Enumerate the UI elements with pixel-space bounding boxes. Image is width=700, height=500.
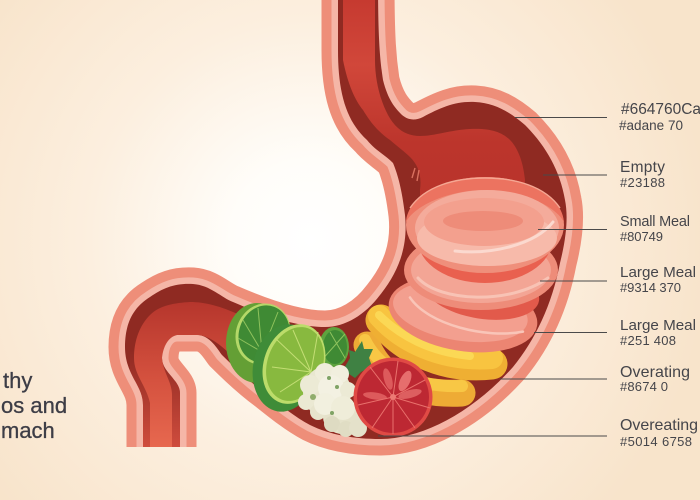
- label overeating: Overeating: [620, 417, 698, 434]
- label overating: Overating: [620, 364, 690, 381]
- cropped title: mach: [1, 418, 55, 443]
- banana lower: [365, 340, 462, 393]
- label large meal one: Large Meal: [620, 264, 696, 281]
- label small meal: [620, 214, 690, 244]
- label large meal two: #251 408: [620, 333, 676, 348]
- label overeating: #5014 6758: [620, 434, 692, 449]
- label large meal two: [620, 317, 696, 348]
- callout lines: [378, 118, 607, 436]
- duodenum red layer: [134, 302, 236, 447]
- label overating: #8674 0: [620, 379, 668, 394]
- label one: #adane 70: [619, 118, 683, 133]
- label one: [619, 101, 700, 133]
- lime three: [319, 327, 349, 367]
- lime two: [246, 315, 336, 417]
- label empty: #23188: [620, 175, 665, 190]
- stomach cavity: [125, 0, 567, 460]
- fold highlight: [412, 168, 419, 181]
- label overating: [620, 364, 690, 394]
- labels: [619, 101, 700, 449]
- label large meal two: Large Meal: [620, 317, 696, 334]
- lime one: [226, 296, 299, 383]
- stomach inner pale lining: [125, 0, 567, 460]
- disc three: [383, 251, 545, 362]
- disc two: [404, 197, 558, 310]
- herb leaf: [343, 341, 373, 378]
- esophagus and stomach body red layer: [343, 0, 525, 260]
- label empty: Empty: [620, 159, 665, 176]
- label overeating: [620, 417, 698, 449]
- stomach outer wall: [125, 0, 567, 460]
- cauliflower: [298, 363, 367, 437]
- banana upper: [379, 315, 492, 365]
- label one: #664760Ca: [621, 101, 700, 118]
- disc one: [406, 177, 564, 273]
- label large meal one: #9314 370: [620, 280, 681, 295]
- label empty: [620, 159, 665, 190]
- food contents: [226, 177, 564, 437]
- stomach anatomy: [125, 0, 567, 460]
- tomato slice: [354, 358, 432, 436]
- cropped title: [1, 368, 67, 443]
- cropped title: os and: [1, 393, 67, 418]
- label large meal one: [620, 264, 696, 295]
- label small meal: #80749: [620, 229, 663, 244]
- label small meal: Small Meal: [620, 214, 690, 230]
- cropped title: thy: [3, 368, 32, 393]
